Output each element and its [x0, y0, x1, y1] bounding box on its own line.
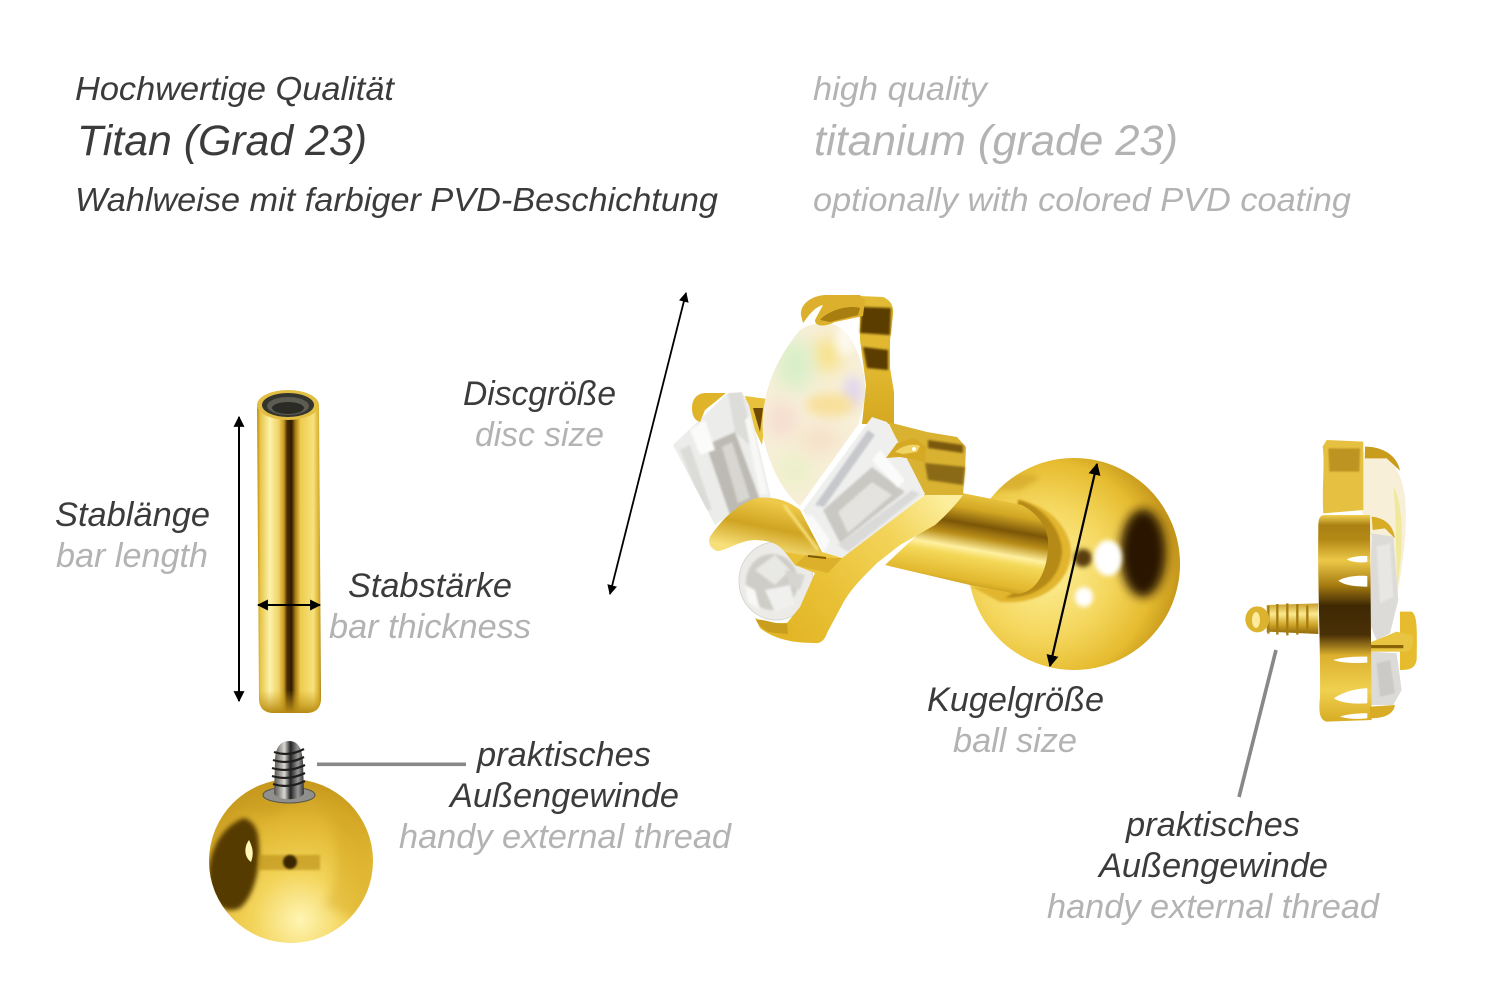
- top prong: [801, 295, 865, 326]
- threaded pin: [1245, 603, 1318, 635]
- label: external thread (left): praktisches: [476, 736, 651, 774]
- label: external thread (right): handy external thread: [1047, 888, 1380, 926]
- arrow: disc size: [610, 293, 686, 594]
- heading: German quality text: [75, 70, 719, 218]
- leader line: external thread (left): [317, 762, 466, 766]
- heading: German quality text: Wahlweise mit farbiger PVD-Beschichtung: [75, 181, 719, 218]
- label: ball size: [927, 681, 1104, 760]
- leader line: external thread (right): [1239, 650, 1276, 797]
- label: ball size: ball size: [953, 722, 1077, 760]
- label: bar thickness: Stabstärke: [348, 567, 512, 605]
- heading: German quality text: Hochwertige Qualität: [75, 70, 396, 107]
- V-shaped front frame: [709, 495, 963, 643]
- label: disc size: disc size: [475, 416, 604, 454]
- label: external thread (right): Außengewinde: [1097, 847, 1328, 885]
- arrow: bar thickness: [258, 604, 320, 606]
- label: disc size: [463, 375, 616, 454]
- right prong: [886, 438, 926, 462]
- heading: German quality text: Titan (Grad 23): [77, 117, 367, 165]
- main plate: [1318, 515, 1372, 722]
- assembled barbell with jewelled disc: [665, 295, 1180, 670]
- heading: English quality text: titanium (grade 23): [814, 117, 1178, 165]
- rear tab: [1400, 612, 1417, 670]
- label: external thread (right): [1047, 806, 1380, 926]
- threaded bar component: [257, 390, 321, 713]
- rear right plate: [888, 422, 966, 497]
- opal edge: [1362, 452, 1406, 600]
- label: disc size: Discgröße: [463, 375, 616, 413]
- label: external thread (left): [399, 736, 732, 856]
- side stones: [1369, 533, 1398, 640]
- side view of disc with threaded pin: [1245, 440, 1417, 722]
- label: external thread (right): praktisches: [1125, 806, 1300, 844]
- label: bar length: [55, 496, 210, 575]
- label: bar length: bar length: [56, 537, 208, 575]
- left baguette: [673, 392, 771, 525]
- externally threaded ball: [208, 741, 373, 943]
- label: bar length: Stablänge: [55, 496, 210, 534]
- opal: [762, 324, 865, 506]
- heading: English quality text: high quality: [813, 70, 990, 107]
- ball: [968, 458, 1180, 670]
- heading: English quality text: optionally with colored PVD coating: [813, 181, 1352, 218]
- label: ball size: Kugelgröße: [927, 681, 1104, 719]
- upper plate: [1323, 440, 1363, 513]
- rear plate top: [860, 296, 894, 424]
- heading: English quality text: [813, 70, 1352, 218]
- arrow: bar length: [238, 417, 240, 701]
- arrow: ball size: [1050, 464, 1097, 666]
- label: bar thickness: [329, 567, 531, 646]
- left prong: [692, 393, 726, 422]
- label: bar thickness: bar thickness: [329, 608, 531, 646]
- right baguette: [803, 417, 925, 558]
- jewelled setting: [665, 295, 966, 643]
- round stone: [739, 542, 813, 620]
- post: [885, 493, 1071, 602]
- label: external thread (left): handy external thread: [399, 818, 732, 856]
- rear left plate: [745, 396, 768, 445]
- label: external thread (left): Außengewinde: [448, 777, 679, 815]
